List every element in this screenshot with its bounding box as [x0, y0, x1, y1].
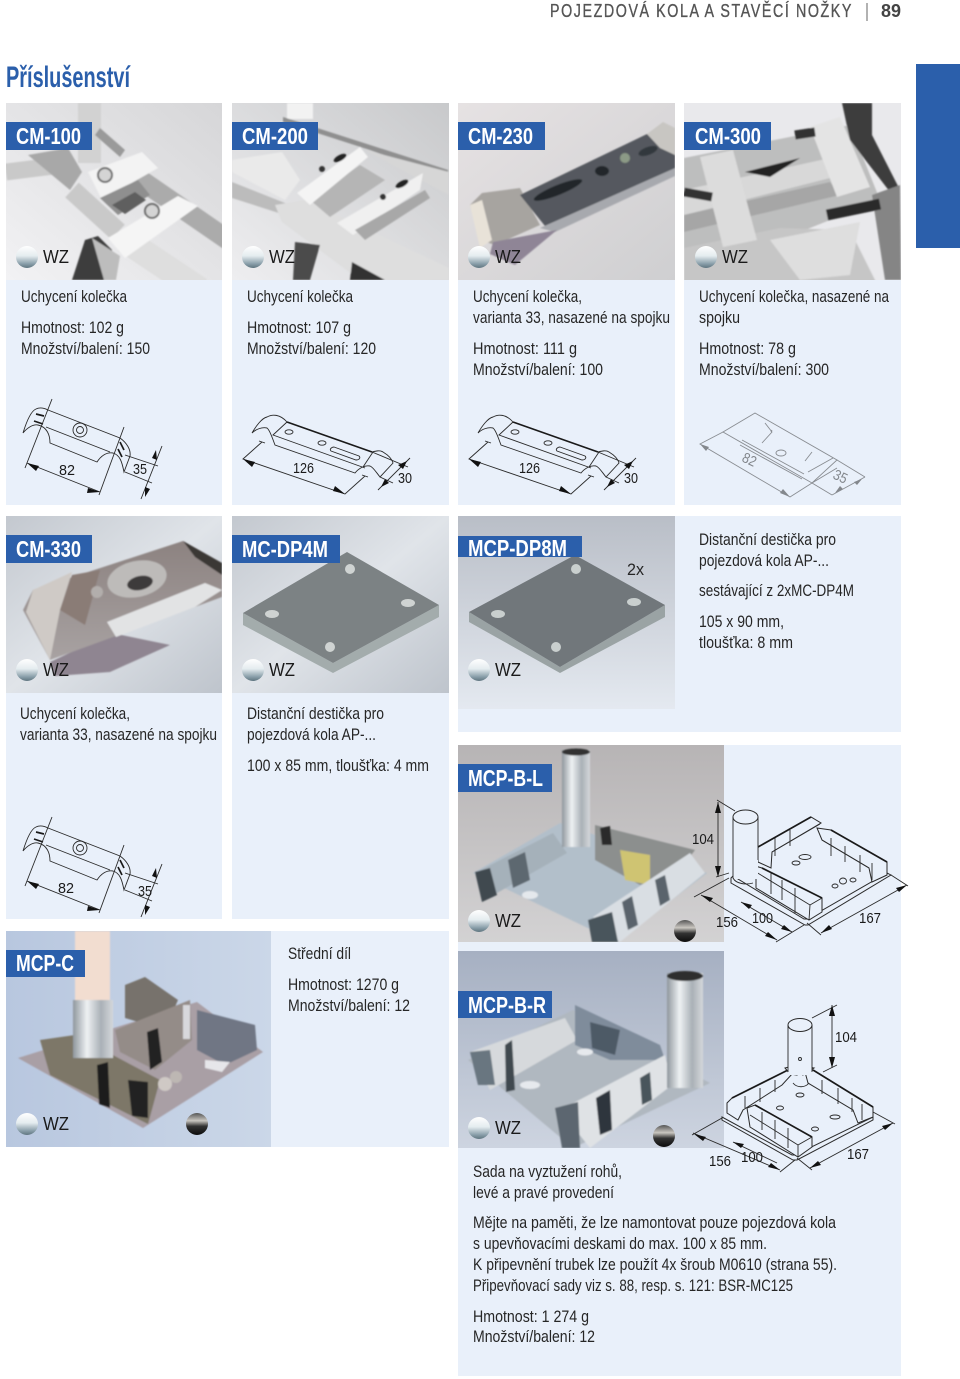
photo: CM-200	[232, 103, 449, 280]
page header: POJEZDOVÁ KOLA A STAVĚCÍ NOŽKY	[550, 1, 853, 21]
finish: WZ	[16, 1113, 69, 1135]
description: MC-DP4M: 100 x 85 mm, tloušťka: 4 mm	[247, 757, 429, 775]
finish: WZ: WZ	[269, 660, 295, 680]
description: CM-200: Uchycení kolečka	[247, 288, 354, 306]
description: CM-100: Množství/balení: 150	[21, 340, 150, 358]
description: MCP-B: Sada na vyztužení rohů,	[473, 1163, 622, 1181]
finish: WZ: WZ	[495, 247, 521, 267]
description: MC-DP4M: Distanční destička pro	[247, 705, 384, 723]
finish: WZ: WZ	[722, 247, 748, 267]
dimension drawing: CM-100: 82	[59, 463, 75, 479]
photo: MCP-B-L	[458, 745, 724, 942]
description: MCP-C: Hmotnost: 1270 g	[288, 976, 399, 994]
description: CM-300: Uchycení kolečka, nasazené na	[699, 288, 890, 306]
description: CM-230: Množství/balení: 100	[473, 361, 603, 379]
dimension drawing: CM-230: 30	[624, 471, 638, 487]
description: CM-100: Uchycení kolečka	[21, 288, 128, 306]
label: CM-100: CM-100	[16, 123, 81, 149]
dimension drawing: CM-230: 126	[519, 461, 540, 477]
finish: WZ: WZ	[43, 247, 69, 267]
title: Příslušenství	[6, 61, 131, 94]
label: CM-300: CM-300	[695, 123, 761, 149]
finish: WZ: WZ	[269, 247, 295, 267]
description: MCP-B: Hmotnost: 1 274 g	[473, 1308, 589, 1326]
description: MCP-B	[473, 1163, 837, 1346]
dimension drawing: CM-300: 35	[830, 467, 850, 488]
label: CM-330: CM-330	[16, 536, 81, 562]
finish: black	[653, 1125, 675, 1147]
finish: WZ	[468, 910, 521, 932]
description: MCP-B: Připevňovací sady viz s. 88, resp. s. 121: BSR-MC125	[473, 1277, 793, 1295]
description: MCP-C: Střední díl	[288, 945, 351, 963]
dimension drawing: CM-200: 126	[293, 461, 314, 477]
label: MCP-DP8M: MCP-DP8M	[468, 535, 567, 561]
dimension drawing: CM-300: 82	[739, 450, 759, 471]
description: MCP-B: Mějte na paměti, že lze namontovat pouze pojezdová kola	[473, 1214, 837, 1232]
dimension drawing: MCP-B-R	[692, 1005, 895, 1172]
quantity note: 2x	[627, 561, 645, 579]
description: CM-330: varianta 33, nasazené na spojku	[20, 726, 217, 744]
description: CM-230: varianta 33, nasazené na spojku	[473, 309, 670, 327]
description: CM-200: Množství/balení: 120	[247, 340, 376, 358]
finish: WZ	[16, 246, 69, 268]
description: CM-230	[473, 288, 670, 379]
photo: CM-230	[458, 103, 675, 280]
description: MCP-B: Množství/balení: 12	[473, 1328, 595, 1346]
description: CM-100: Hmotnost: 102 g	[21, 319, 124, 337]
dimension drawing: CM-330: 82	[58, 881, 74, 897]
description: MC-DP4M: pojezdová kola AP-...	[247, 726, 376, 744]
description: CM-300: Hmotnost: 78 g	[699, 340, 796, 358]
dimension drawing: MCP-B-L: 167	[859, 911, 881, 927]
photo: MCP-DP8M	[458, 516, 675, 709]
dimension drawing: CM-300	[700, 413, 865, 497]
finish: WZ: WZ	[495, 660, 521, 680]
photo: MCP-B-R	[458, 951, 724, 1148]
finish: WZ: WZ	[495, 911, 521, 931]
description: MC-DP4M	[247, 705, 429, 775]
finish: WZ: WZ	[43, 660, 69, 680]
description: CM-200: Hmotnost: 107 g	[247, 319, 351, 337]
finish: WZ	[468, 246, 521, 268]
label: MCP-B-L: MCP-B-L	[468, 765, 543, 791]
page header: 89	[881, 1, 901, 21]
label: MC-DP4M: MC-DP4M	[242, 536, 328, 562]
photo: MC-DP4M	[232, 516, 449, 693]
photo: MCP-C	[6, 931, 271, 1147]
dimension drawing: CM-100	[23, 399, 162, 499]
description: CM-330	[20, 705, 217, 744]
description: MCP-B: levé a pravé provedení	[473, 1184, 614, 1202]
dimension drawing: CM-330: 35	[138, 884, 152, 900]
label: MCP-C: MCP-C	[16, 950, 74, 976]
dimension drawing: CM-100: 35	[133, 462, 147, 478]
finish: WZ	[695, 246, 748, 268]
description: MCP-DP8M: sestávající z 2xMC-DP4M	[699, 582, 854, 600]
dimension drawing: MCP-B-L: 100	[752, 911, 773, 927]
description: MCP-B: K připevnění trubek lze použít 4x šroub M0610 (strana 55).	[473, 1256, 837, 1274]
dimension drawing: CM-200	[243, 415, 412, 494]
finish: WZ	[468, 659, 521, 681]
dimension drawing: MCP-B-R: 156	[709, 1154, 731, 1170]
label: MCP-B-R: MCP-B-R	[468, 992, 546, 1018]
panel: CM-300	[684, 103, 901, 505]
finish: WZ: WZ	[43, 1114, 69, 1134]
photo: CM-100	[6, 103, 228, 290]
finish: WZ	[242, 659, 295, 681]
finish: WZ: WZ	[495, 1118, 521, 1138]
label: CM-200: CM-200	[242, 123, 308, 149]
description: MCP-DP8M: Distanční destička pro	[699, 531, 836, 549]
finish: black	[186, 1113, 208, 1135]
finish: WZ	[242, 246, 295, 268]
dimension drawing: CM-230	[469, 415, 638, 494]
panel: CM-200	[232, 103, 449, 505]
panel: MCP-B	[458, 745, 908, 1376]
finish: WZ	[468, 1117, 521, 1139]
description: CM-200	[247, 288, 376, 358]
description: MCP-DP8M: tloušťka: 8 mm	[699, 634, 793, 652]
description: CM-100	[21, 288, 150, 358]
description: MCP-C: Množství/balení: 12	[288, 997, 410, 1015]
dimension drawing: MCP-B-R: 104	[835, 1030, 857, 1046]
description: CM-300	[699, 288, 890, 379]
dimension drawing: MCP-B-L: 104	[692, 832, 714, 848]
panel: CM-230	[458, 103, 675, 505]
panel: MCP-C	[6, 931, 449, 1147]
panel: MC-DP4M	[232, 516, 449, 919]
finish: black	[674, 920, 696, 942]
description: CM-300: Množství/balení: 300	[699, 361, 829, 379]
description: CM-230: Hmotnost: 111 g	[473, 340, 577, 358]
description: CM-330: Uchycení kolečka,	[20, 705, 130, 723]
description: MCP-B: s upevňovacími deskami do max. 100 x 85 mm.	[473, 1235, 767, 1253]
description: MCP-C	[288, 945, 410, 1015]
description: CM-300: spojku	[699, 309, 740, 327]
dimension drawing: MCP-B-L	[692, 800, 908, 942]
dimension drawing: MCP-B-R: 167	[847, 1147, 869, 1163]
panel: MCP-DP8M	[458, 516, 901, 732]
photo: CM-300	[684, 103, 901, 290]
panel: CM-100	[6, 103, 228, 505]
dimension drawing: CM-200: 30	[398, 471, 412, 487]
description: MCP-DP8M: pojezdová kola AP-...	[699, 552, 829, 570]
photo: CM-330	[6, 516, 222, 693]
description: MCP-DP8M	[699, 531, 854, 652]
section tab	[916, 64, 960, 248]
finish: WZ	[16, 659, 69, 681]
label: CM-230: CM-230	[468, 123, 533, 149]
panel: CM-330	[6, 516, 222, 919]
description: MCP-DP8M: 105 x 90 mm,	[699, 613, 784, 631]
description: CM-230: Uchycení kolečka,	[473, 288, 582, 306]
dimension drawing: CM-330	[23, 817, 162, 917]
dimension drawing: MCP-B-R: 100	[741, 1150, 763, 1166]
dimension drawing: MCP-B-L: 156	[716, 915, 738, 931]
